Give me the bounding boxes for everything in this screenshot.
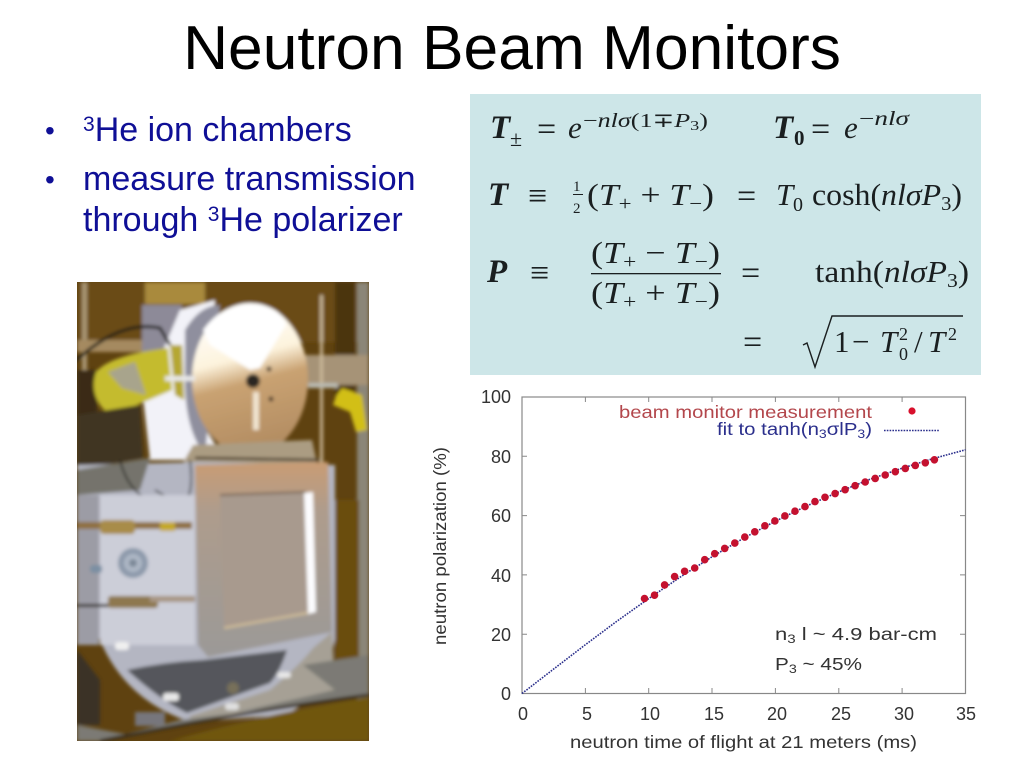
equation: T zero: e: [844, 110, 858, 145]
equation: P definition: =: [741, 255, 760, 292]
equation: square root form: −: [852, 324, 869, 359]
annotation: fit parameters: P: [775, 654, 787, 674]
equation: square root form: 1: [834, 324, 850, 359]
x axis labels: 5: [582, 704, 592, 724]
equation: P definition: tanh(nlσP: [815, 254, 942, 289]
bullet list: [45, 111, 416, 239]
equation: P definition: 3: [947, 270, 958, 292]
annotation: fit parameters: 3: [789, 662, 797, 676]
annotation: fit parameters: n: [775, 624, 785, 644]
equation: T definition: +: [632, 177, 669, 212]
y axis title: neutron polarization (%): [430, 447, 450, 645]
equation: T zero: T: [773, 110, 795, 146]
back of chamber: [143, 300, 225, 460]
equation: P definition: +: [623, 251, 636, 273]
equation: P definition: [486, 235, 969, 313]
equation: square root form: 0: [899, 344, 908, 364]
dial: [118, 548, 148, 578]
equation: square root form: 2: [948, 324, 957, 344]
white slit: [304, 492, 316, 614]
equation: square root form: =: [743, 324, 762, 361]
equation: square root form: /: [914, 324, 923, 359]
equation: T plus-minus: T: [490, 110, 512, 146]
yellow wrap, right: [333, 388, 367, 432]
equation: T plus-minus: e: [568, 110, 582, 145]
front disc: [192, 303, 308, 455]
annotation: fit parameters: l ~ 4.9 bar-cm: [796, 624, 937, 644]
equation: T plus-minus: 3: [690, 119, 699, 134]
equation: T definition: T: [488, 177, 510, 213]
equation: T zero: =: [811, 111, 830, 148]
equation: T definition: 2: [573, 201, 580, 217]
fit curve: [522, 450, 966, 694]
equation: T definition: 0: [793, 194, 803, 216]
equation: square root form: [743, 316, 963, 367]
equation: T definition: ≡: [528, 178, 547, 215]
equation: T definition: cosh(nlσP: [812, 177, 939, 212]
equation: P definition: ): [708, 235, 720, 270]
x axis labels: 15: [704, 704, 724, 724]
equation: P definition: T: [675, 235, 698, 270]
x axis labels: 30: [894, 704, 914, 724]
x axis labels: 25: [831, 704, 851, 724]
equation: T definition: 3: [941, 193, 951, 215]
y axis labels: 0: [501, 684, 511, 704]
equation: P definition: T: [675, 275, 698, 310]
equation: T plus-minus: ±: [510, 126, 522, 151]
measurement points: [641, 456, 938, 602]
equation: T definition: −: [689, 193, 702, 215]
chamber body: [77, 462, 335, 722]
bullet: measure transmission: •: [45, 164, 55, 195]
equation: square root form: T: [928, 324, 948, 359]
legend: σlP: [827, 419, 857, 439]
equation: P definition: ≡: [530, 255, 549, 292]
annotation: fit parameters: [775, 624, 937, 676]
title: Neutron Beam Monitors: [183, 14, 841, 83]
bullet: 3He ion chambers: He ion chambers: [95, 111, 352, 149]
equation: T definition: +: [619, 193, 632, 215]
mounting plate: [195, 462, 332, 657]
equation: T definition: 1: [573, 179, 580, 195]
equation: P definition: +: [636, 275, 675, 310]
equation: T definition: [488, 177, 962, 217]
photo: neutron beam monitor apparatus: [77, 282, 369, 741]
equation: T definition: ): [702, 177, 714, 212]
x axis title: neutron time of flight at 21 meters (ms): [570, 732, 917, 752]
legend: fit to tanh(n: [717, 419, 805, 439]
legend: beam monitor measurement: [619, 402, 872, 422]
equation: P definition: ): [958, 254, 969, 289]
equation: P definition: +: [623, 291, 636, 313]
equation: T definition: ): [951, 177, 962, 212]
axes frame: [522, 397, 966, 694]
y axis labels: [481, 387, 511, 704]
equation: T definition: =: [737, 178, 756, 215]
connectors: [77, 522, 192, 529]
equation: T plus-minus: =: [537, 111, 556, 148]
legend: ): [865, 419, 872, 439]
y axis labels: 80: [491, 447, 511, 467]
y axis labels: 60: [491, 506, 511, 526]
legend: 3: [857, 427, 866, 441]
panel: transmission and polarization equations: [470, 94, 981, 375]
x axis labels: 0: [518, 704, 528, 724]
equation: P definition: −: [695, 291, 708, 313]
lower dark shadow: [127, 650, 287, 713]
x axis labels: 10: [640, 704, 660, 724]
equation: T zero: [773, 108, 911, 150]
equation: P definition: (T: [591, 235, 620, 270]
bullet: measure transmission: measure transmission: [83, 160, 416, 198]
chart: neutron polarization vs time of flight: [430, 387, 976, 752]
equation: T definition: (T: [587, 177, 616, 212]
equation: T plus-minus: ): [699, 110, 708, 132]
x axis labels: 35: [956, 704, 976, 724]
x axis labels: 20: [767, 704, 787, 724]
bullet: measure transmission: through: [83, 201, 198, 239]
annotation: fit parameters: 3: [787, 632, 796, 646]
x axis labels: [518, 704, 976, 724]
frame and lower floor: [77, 655, 369, 741]
bullet: measure transmission: He polarizer: [219, 201, 403, 239]
equation: square root form: 2: [899, 324, 908, 344]
y axis labels: 40: [491, 566, 511, 586]
equation: P definition: (T: [591, 275, 620, 310]
yellow wrap, left: [94, 348, 172, 413]
equation: T definition: T: [669, 177, 692, 212]
equation: P definition: −: [636, 235, 675, 270]
bullet: 3He ion chambers: 3: [83, 113, 95, 136]
equation: square root form: T: [880, 324, 900, 359]
legend: 3: [819, 427, 827, 441]
equation: T plus-minus: −nlσ (1∓ P: [583, 110, 687, 132]
equation: T plus-minus: [490, 110, 708, 151]
equation: P definition: −: [695, 251, 708, 273]
bullet: measure transmission: [45, 160, 416, 239]
bullet: 3He ion chambers: •: [45, 115, 55, 146]
equation: P definition: P: [486, 254, 508, 290]
y axis labels: 20: [491, 625, 511, 645]
equation: T zero: 0: [794, 126, 804, 150]
equation: P definition: ): [708, 275, 720, 310]
equation: T zero: −nlσ: [859, 108, 911, 130]
annotation: fit parameters: ~ 45%: [797, 654, 862, 674]
equation: T definition: T: [776, 177, 796, 212]
legend: [619, 402, 939, 441]
bullet: measure transmission: 3: [208, 203, 219, 226]
y axis labels: 100: [481, 387, 511, 407]
